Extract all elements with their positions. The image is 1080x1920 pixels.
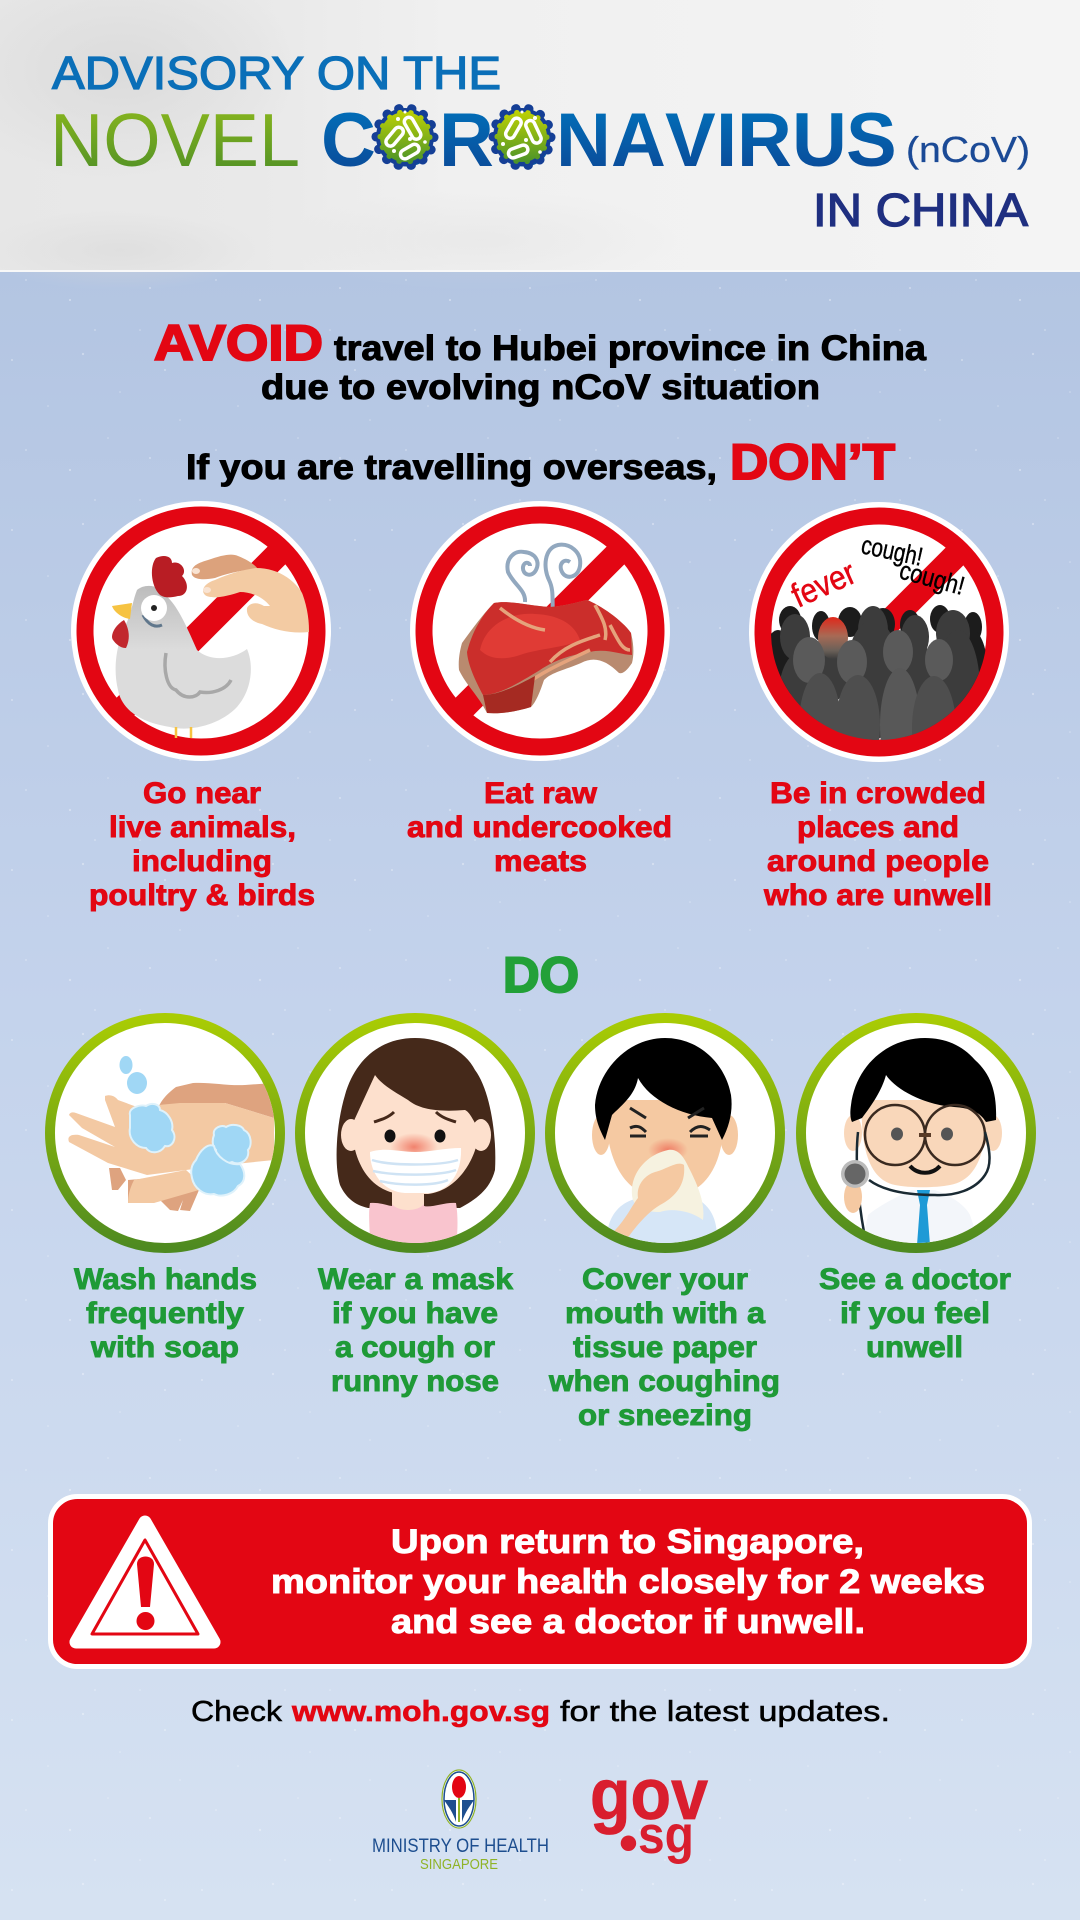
- caption: See a doctor: [819, 1263, 1011, 1296]
- word: cough: cough!: [896, 555, 968, 601]
- logo: ministry of health: [372, 1770, 549, 1873]
- caption: who are unwell: [763, 879, 992, 912]
- caption: poultry & birds: [89, 879, 315, 912]
- banner box: [50, 1496, 1030, 1666]
- logo: gov.sg: sg: [638, 1806, 694, 1865]
- banner text: monitor your health closely for 2 weeks: [271, 1563, 985, 1601]
- footer note: [191, 1696, 890, 1728]
- caption: meats: [494, 845, 587, 878]
- line: due to evolving: due to evolving nCoV situation: [261, 368, 820, 407]
- caption: [74, 1263, 257, 1364]
- caption: mouth with a: [565, 1297, 765, 1330]
- caption: Go near: [143, 777, 261, 810]
- prohibition sign: [410, 501, 670, 761]
- caption: [548, 1263, 780, 1432]
- header band: [0, 0, 1080, 290]
- caption: Wash hands: [74, 1263, 257, 1296]
- caption: places and: [797, 811, 959, 844]
- icon: chicken: [112, 556, 251, 738]
- title suffix: ncov: (nCoV): [906, 129, 1030, 170]
- caption: tissue paper: [573, 1331, 757, 1364]
- title word: novel: NOVEL: [50, 98, 300, 182]
- caption: Be in crowded: [770, 777, 986, 810]
- logo: gov.sg: gov: [590, 1755, 708, 1835]
- banner text: and see a doctor if unwell.: [391, 1603, 865, 1641]
- callout: return monitoring banner: [50, 1496, 1030, 1666]
- avoid statement: [154, 315, 927, 407]
- caption: including: [132, 845, 272, 878]
- caption: if you feel: [840, 1297, 990, 1330]
- icon: raw meat: [459, 600, 633, 713]
- prohibition sign: [71, 501, 331, 761]
- logo: gov.sg: •: [619, 1813, 638, 1873]
- caption: [763, 777, 992, 912]
- word: fever: fever: [786, 554, 862, 615]
- caption: frequently: [86, 1297, 244, 1330]
- caption: around people: [767, 845, 989, 878]
- caption: Eat raw: [484, 777, 598, 810]
- caption: unwell: [866, 1331, 963, 1364]
- footer note: for the latest updates.: [560, 1696, 890, 1728]
- caption: runny nose: [331, 1365, 499, 1398]
- panel: don't eat raw meat: [407, 501, 672, 878]
- icon: steam: [507, 545, 580, 615]
- logo: gov.sg: [590, 1755, 708, 1873]
- panel: don't go near live animals: [71, 501, 331, 912]
- icon: crowd: [771, 605, 986, 740]
- panel: wash hands: [50, 1018, 280, 1364]
- icon: moh crest: [442, 1770, 476, 1828]
- ring: [50, 1018, 280, 1248]
- line: if you are travelling: If you are travelling overseas,: [186, 448, 717, 487]
- text: ministry of health: MINISTRY OF HEALTH: [372, 1836, 549, 1857]
- caption: [89, 777, 315, 912]
- caption: [819, 1263, 1011, 1364]
- icon: boy sneezing: [592, 1038, 738, 1245]
- caption: or sneezing: [578, 1399, 752, 1432]
- icon: girl with mask: [337, 1038, 495, 1245]
- panel: cover your mouth: [548, 1018, 780, 1432]
- caption: and undercooked: [407, 811, 672, 844]
- title: [50, 47, 1030, 236]
- footer note: Check: [191, 1696, 283, 1728]
- icon: hand: [192, 555, 310, 633]
- panel: see a doctor: [801, 1018, 1031, 1364]
- caption: Cover your: [582, 1263, 748, 1296]
- footer note: www.moh.gov.sg: [291, 1696, 550, 1728]
- icon: washing hands: [68, 1056, 274, 1211]
- caption: when coughing: [548, 1365, 780, 1398]
- caption: a cough or: [335, 1331, 495, 1364]
- title word: coronavirus: CORONAVIRUS: [321, 98, 897, 183]
- word: avoid: AVOID: [154, 315, 323, 371]
- heading: do: DO: [503, 947, 579, 1003]
- panel: don't be in crowded places: [749, 502, 1009, 912]
- icon: doctor: [841, 1038, 1002, 1245]
- banner text: Upon return to Singapore,: [391, 1523, 864, 1561]
- caption: if you have: [332, 1297, 498, 1330]
- ring: [300, 1018, 530, 1248]
- ring: [801, 1018, 1031, 1248]
- prohibition sign: [749, 502, 1009, 762]
- word: cough: cough!: [859, 530, 926, 572]
- word: don't: DON’T: [730, 434, 895, 490]
- banner text: [271, 1523, 985, 1641]
- caption: live animals,: [109, 811, 296, 844]
- caption: Wear a mask: [318, 1263, 513, 1296]
- virus icon left: [376, 108, 434, 166]
- caption: with soap: [90, 1331, 239, 1364]
- virus icon right: [493, 108, 551, 166]
- ring: [550, 1018, 780, 1248]
- caption: [407, 777, 672, 878]
- title line: advisory on the: ADVISORY ON THE: [52, 47, 501, 99]
- line: travel to hubei: travel to Hubei province in China: [334, 329, 927, 368]
- icon: warning triangle: [76, 1522, 214, 1642]
- don't heading: [186, 434, 895, 490]
- title line: in china: IN CHINA: [813, 184, 1028, 236]
- caption: [318, 1263, 513, 1398]
- panel: wear a mask: [300, 1018, 530, 1398]
- text: singapore: SINGAPORE: [420, 1856, 498, 1873]
